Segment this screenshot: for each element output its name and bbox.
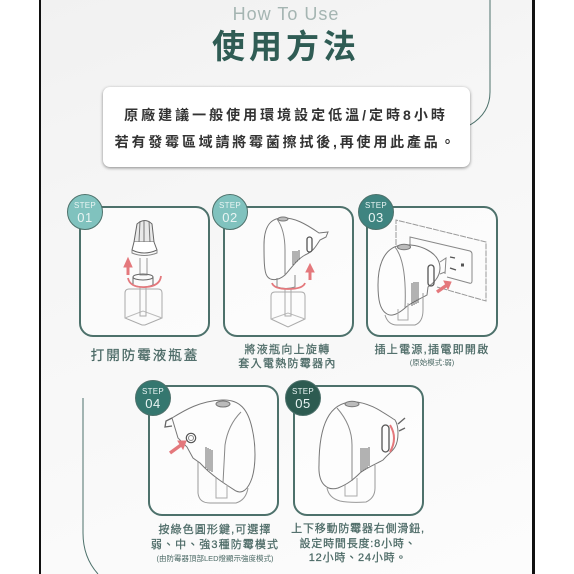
- caption: step 5: [291, 522, 425, 564]
- caption: step 4: [151, 524, 279, 551]
- arrow: red slider curve: [390, 425, 394, 452]
- badge: step 05: [285, 380, 321, 416]
- panel: step 3: [366, 206, 498, 336]
- notice card: [102, 87, 470, 167]
- caption: step 5: 設定時間長度:8小時、: [300, 538, 416, 550]
- badge: step 03: [358, 194, 394, 230]
- caption: step 2: 將液瓶向上旋轉: [244, 344, 331, 356]
- caption: step 1: 打開防霉液瓶蓋: [91, 348, 199, 363]
- badge: step 03: STEP: [365, 201, 387, 210]
- panel: step 2: [222, 206, 354, 336]
- left border line: [39, 0, 40, 574]
- caption: step 4: 弱、中、強3種防霉模式: [151, 539, 279, 551]
- badge: step 02: [212, 194, 248, 230]
- arrow: red plug-in: [437, 285, 447, 292]
- panel: step 5: [292, 384, 424, 516]
- panel: step 1: [78, 206, 210, 336]
- subtitle: How To Use: [233, 4, 339, 24]
- caption: step 3: 插上電源,插電即開啟: [374, 344, 490, 356]
- badge: step 03: 03: [368, 210, 384, 225]
- badge: step 01: STEP: [74, 201, 96, 210]
- notice line 1: 原廠建議一般使用環境設定低溫/定時8小時: [124, 107, 448, 123]
- arrow: red button pointer: [170, 445, 181, 453]
- badge: step 01: 01: [77, 210, 93, 225]
- caption: step 2: [238, 344, 337, 370]
- panel: step 4: [148, 384, 279, 516]
- title: 使用方法: [212, 28, 360, 65]
- badge: step 05: 05: [295, 396, 311, 411]
- notice line 2: 若有發霉區域請將霉菌擦拭後,再使用此產品。: [115, 134, 457, 150]
- caption: step 4: 按綠色圓形鍵,可選擇: [158, 524, 272, 536]
- badge: step 04: 04: [145, 396, 161, 411]
- caption: step 5: 12小時、24小時。: [309, 552, 407, 564]
- note: step 4: (由防霉器頂部LED燈顯示強度模式): [156, 554, 274, 563]
- caption: step 5: 上下移動防霉器右側滑鈕,: [291, 523, 425, 535]
- note: step 3: (原始模式:弱): [410, 358, 454, 367]
- badge: step 04: [135, 380, 171, 416]
- badge: step 01: [67, 194, 103, 230]
- badge: step 02: 02: [222, 210, 238, 225]
- badge: step 05: STEP: [292, 387, 314, 396]
- badge: step 02: STEP: [219, 201, 241, 210]
- arrows: rotate and up: [272, 264, 314, 289]
- badge: step 04: STEP: [142, 387, 164, 396]
- right border band: [532, 0, 535, 574]
- arrows: red up and rotate: [124, 258, 161, 287]
- caption: step 2: 套入電熱防霉器內: [238, 358, 337, 370]
